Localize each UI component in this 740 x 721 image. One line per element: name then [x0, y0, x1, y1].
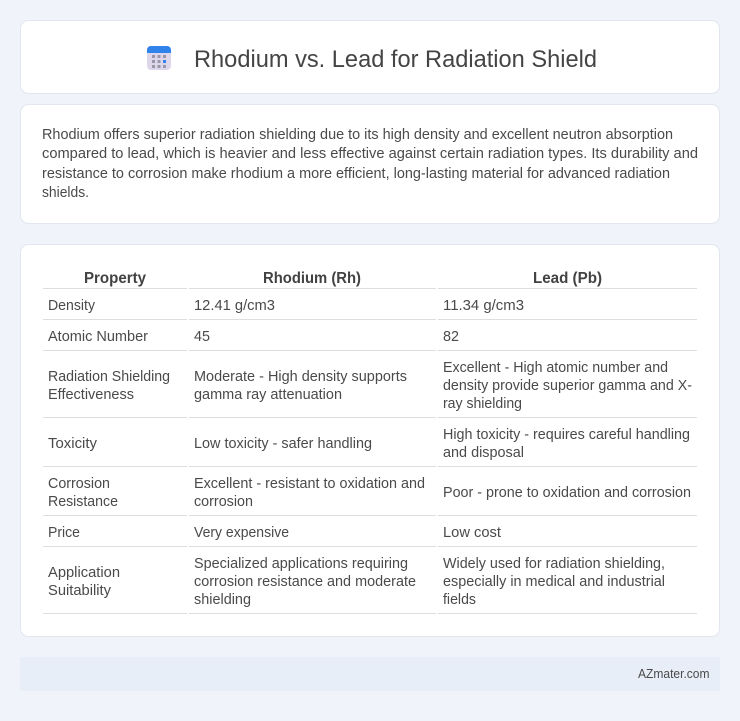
summary text: Rhodium offers superior radiation shielding due to its high density and excellent neutron absorption	[42, 127, 673, 143]
row: atomic number: 82	[443, 329, 459, 345]
row: atomic number: Atomic Number	[48, 329, 148, 345]
row: application suitability: Application	[48, 565, 120, 581]
row: radiation shielding effectiveness: Excellent - High atomic number and	[443, 360, 668, 376]
row: toxicity	[48, 427, 690, 461]
row: radiation shielding effectiveness	[48, 360, 692, 412]
row: application suitability: Widely used for radiation shielding,	[443, 556, 665, 572]
row: radiation shielding effectiveness: Moderate - High density supports	[194, 369, 407, 385]
row: application suitability: shielding	[194, 592, 251, 608]
row: radiation shielding effectiveness: density provide superior gamma and X-	[443, 378, 692, 394]
footer credit: AZmater.com	[638, 667, 710, 681]
row: price: Price	[48, 525, 80, 541]
panel: comparison table	[20, 244, 720, 636]
row: price: Low cost	[443, 525, 501, 541]
row: radiation shielding effectiveness: ray shielding	[443, 396, 522, 412]
row: corrosion resistance: Excellent - resistant to oxidation and	[194, 476, 425, 492]
footer	[20, 657, 720, 691]
table header: Lead (Pb)	[533, 270, 602, 287]
title panel	[20, 20, 720, 94]
row: density: 12.41 g/cm3	[194, 298, 275, 314]
table header: Rhodium (Rh)	[263, 270, 361, 287]
row: density: 11.34 g/cm3	[443, 298, 524, 314]
row: toxicity: and disposal	[443, 445, 524, 461]
row: radiation shielding effectiveness: Radiation Shielding	[48, 369, 170, 385]
row: atomic number	[48, 329, 459, 345]
row: application suitability: Suitability	[48, 583, 112, 599]
row: density: Density	[48, 298, 96, 314]
row: radiation shielding effectiveness: Effectiveness	[48, 387, 134, 403]
row: toxicity: Low toxicity - safer handling	[194, 436, 372, 452]
row: corrosion resistance: Corrosion	[48, 476, 110, 492]
row: application suitability: especially in medical and industrial	[443, 574, 665, 590]
row: toxicity: Toxicity	[48, 436, 98, 452]
row: application suitability: fields	[443, 592, 476, 608]
row: corrosion resistance: corrosion	[194, 494, 253, 510]
row: toxicity: High toxicity - requires careful handling	[443, 427, 690, 443]
icon: calendar	[147, 46, 171, 70]
row: density	[48, 298, 524, 314]
summary text	[42, 127, 698, 201]
row: atomic number: 45	[194, 329, 210, 345]
row: price: Very expensive	[194, 525, 289, 541]
row: corrosion resistance: Resistance	[48, 494, 118, 510]
row: application suitability: corrosion resistance and moderate	[194, 574, 416, 590]
table header	[84, 270, 602, 287]
table header: Property	[84, 270, 146, 287]
summary text: compared to lead, which is heavier and less effective against certain radiation types. Its durability and	[42, 146, 698, 162]
row: corrosion resistance	[48, 476, 691, 510]
panel: summary	[20, 104, 720, 224]
row: application suitability: Specialized applications requiring	[194, 556, 408, 572]
summary text: resistance to corrosion make rhodium a more efficient, long-lasting material for advanced radiation	[42, 166, 670, 182]
row: corrosion resistance: Poor - prone to oxidation and corrosion	[443, 485, 691, 501]
row: price	[48, 525, 501, 541]
row: application suitability	[48, 556, 665, 608]
summary text: shields.	[42, 185, 89, 201]
title: Rhodium vs. Lead for Radiation Shield	[194, 46, 597, 73]
row: radiation shielding effectiveness: gamma ray attenuation	[194, 387, 342, 403]
